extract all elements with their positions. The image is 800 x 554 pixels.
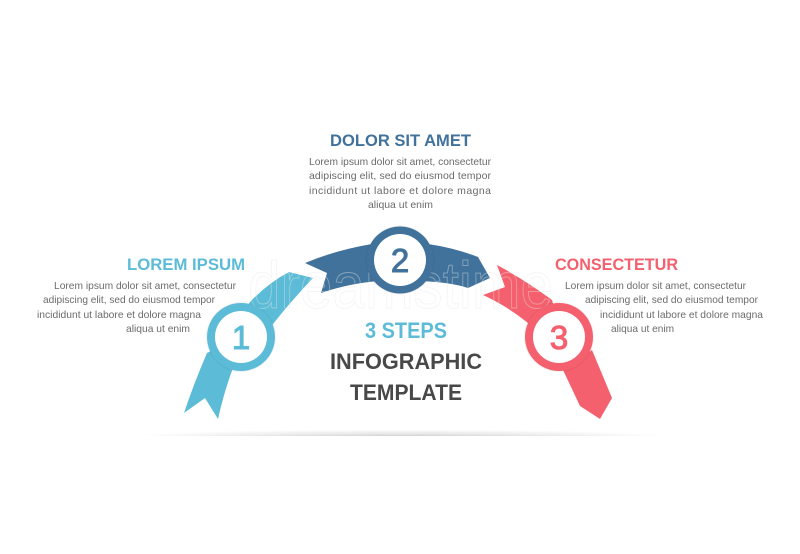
center title bbox=[330, 318, 482, 405]
text block: lorem ipsum: incididunt ut labore et dolore magna bbox=[37, 309, 201, 321]
text block: lorem ipsum: aliqua ut enim bbox=[126, 323, 190, 335]
text block: consectetur: incididunt ut labore et dolore magna bbox=[600, 309, 763, 321]
text block: dolor sit amet: Lorem ipsum dolor sit amet, consectetur bbox=[309, 156, 491, 168]
text block: consectetur: Lorem ipsum dolor sit amet, consectetur bbox=[565, 280, 746, 292]
text block: lorem ipsum: adipiscing elit, sed do eiusmod tempor bbox=[43, 294, 215, 306]
text block: dolor sit amet: incididunt ut labore et dolore magna bbox=[309, 185, 491, 197]
ground shadow bbox=[136, 424, 664, 436]
text block: lorem ipsum bbox=[37, 255, 245, 335]
center title: 3 STEPS bbox=[365, 318, 447, 343]
step 2 badge bbox=[366, 226, 434, 294]
text block: dolor sit amet: aliqua ut enim bbox=[368, 199, 433, 211]
step 2 badge: 2 bbox=[391, 242, 409, 279]
center title: INFOGRAPHIC bbox=[330, 349, 482, 374]
center title: TEMPLATE bbox=[350, 380, 462, 405]
text block: dolor sit amet: DOLOR SIT AMET bbox=[330, 131, 472, 150]
step 3 badge bbox=[524, 302, 594, 372]
text block: dolor sit amet: adipiscing elit, sed do eiusmod tempor bbox=[309, 170, 492, 182]
text block: lorem ipsum: LOREM IPSUM bbox=[127, 255, 245, 274]
step 1 badge: 1 bbox=[232, 319, 250, 356]
text block: dolor sit amet bbox=[309, 131, 492, 211]
step 1 badge bbox=[206, 302, 276, 372]
text block: consectetur: adipiscing elit, sed do eiusmod tempor bbox=[585, 294, 758, 306]
ribbon 1: blue bbox=[184, 272, 313, 419]
text block: consectetur: CONSECTETUR bbox=[555, 255, 678, 274]
watermark: dreamstime bbox=[248, 248, 553, 322]
text block: consectetur: aliqua ut enim bbox=[611, 323, 674, 335]
step 3 badge: 3 bbox=[550, 319, 568, 356]
text block: lorem ipsum: Lorem ipsum dolor sit amet, consectetur bbox=[54, 280, 236, 292]
ribbon 3: red bbox=[483, 265, 612, 419]
text block: consectetur bbox=[555, 255, 763, 335]
ribbon 2: dark blue bbox=[305, 244, 490, 293]
